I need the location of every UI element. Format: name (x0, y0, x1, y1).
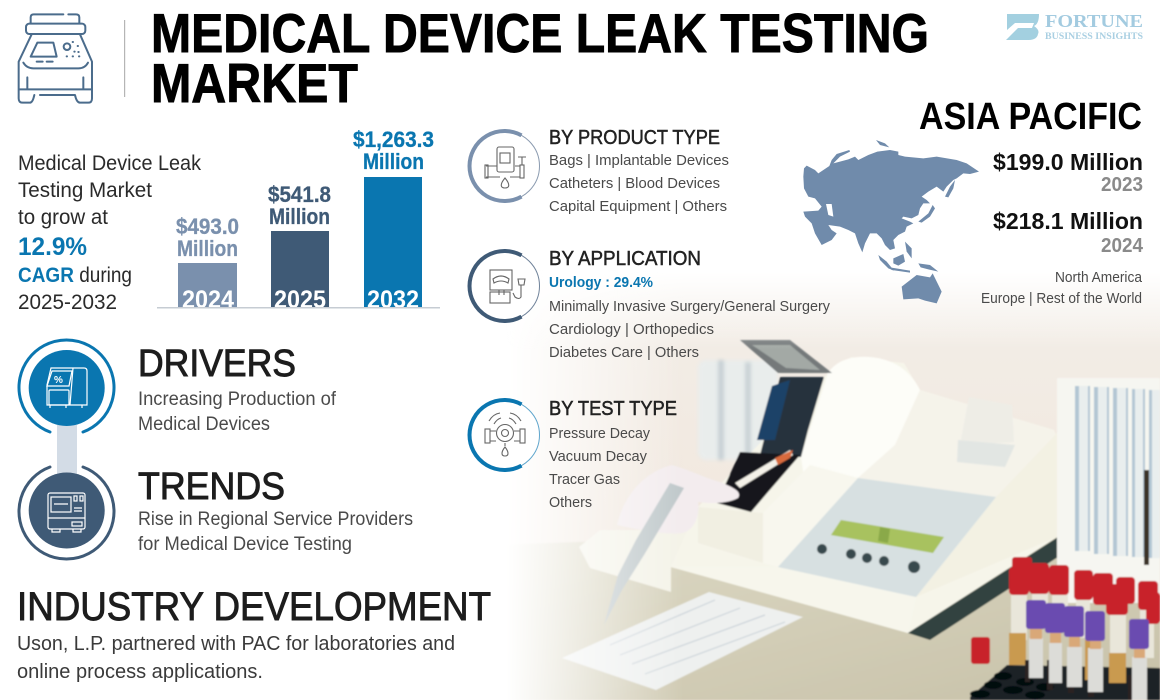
segment list: Capital Equipment | Others (549, 198, 727, 215)
heading: drivers: DRIVERS (138, 343, 296, 385)
drivers text: Medical Devices (138, 414, 270, 435)
segment list (549, 425, 650, 511)
industry development text: Uson, L.P. partnered with PAC for laboratories and (17, 633, 455, 655)
bar 2032: 2032 (367, 286, 419, 314)
segment list: Pressure Decay (549, 425, 650, 442)
bar 2024: $493.0 (176, 214, 239, 239)
other regions: Europe | Rest of the World (981, 291, 1142, 307)
analyzer base (579, 530, 700, 592)
printer cover (698, 507, 763, 563)
segment list: Bags | Implantable Devices (549, 152, 729, 169)
other regions: North America (1055, 270, 1143, 286)
logo: Fortune Business Insights: FORTUNE (1045, 11, 1143, 31)
bar 2032: Million (363, 149, 424, 174)
segment list: Vacuum Decay (549, 448, 647, 465)
regional values (993, 149, 1144, 257)
title (151, 2, 929, 114)
title: MARKET (151, 52, 358, 114)
counter top (500, 520, 1160, 700)
logo: Fortune Business Insights: BUSINESS INSIGHTS (1045, 32, 1143, 42)
sample tubes in compartment (735, 450, 793, 488)
icon: leak testing instrument (19, 14, 92, 103)
bar 2032: $1,263.3 (353, 127, 434, 152)
analyzer right side (916, 433, 1057, 597)
segment list: Cardiology | Orthopedics (549, 321, 714, 338)
panel: by application (470, 248, 830, 361)
heading: BY TEST TYPE (549, 398, 677, 420)
bar 2024: Million (177, 236, 238, 261)
lid (740, 340, 832, 373)
background photo: analyzer in a laboratory (490, 270, 1160, 700)
industry development text: online process applications. (17, 661, 263, 683)
analyzer hood (801, 357, 920, 520)
connector between drivers and trends (57, 425, 77, 475)
icon: surgical monitor (470, 251, 540, 321)
panel: by product type (470, 127, 729, 215)
sample compartment (760, 377, 824, 457)
control panel (778, 478, 996, 597)
heading: BY APPLICATION (549, 248, 701, 270)
paper outlet (960, 397, 1014, 445)
bar 2025 (268, 182, 331, 314)
CAGR text block: to grow at (18, 206, 108, 229)
bar 2025: $541.8 (268, 182, 331, 207)
red caps (971, 557, 1160, 664)
tube rack (970, 665, 1160, 700)
trends text: Rise in Regional Service Providers (138, 509, 413, 530)
bar 2024: 2024 (182, 286, 234, 314)
bar 2025: 2025 (274, 286, 326, 314)
control buttons (817, 544, 920, 573)
heading: industry development: INDUSTRY DEVELOPMENT (17, 585, 491, 629)
icon: drivers: % (54, 375, 63, 386)
icon: pipe with pressure gauge (470, 400, 540, 470)
gloved hand (617, 465, 739, 533)
analyzer printer deck (858, 390, 1057, 497)
CAGR text block: Testing Market (18, 179, 152, 202)
drivers text (138, 389, 337, 435)
icon: device over a leaking pipe (470, 131, 540, 201)
regional values: $199.0 Million (993, 149, 1143, 175)
bar chart: market size (157, 127, 440, 314)
other regions (981, 270, 1143, 307)
regional values: $218.1 Million (993, 208, 1143, 234)
LCD display (831, 520, 944, 553)
segment list: Diabetes Care | Others (549, 344, 699, 361)
industry development text (17, 633, 455, 683)
segment list: Tracer Gas (549, 471, 620, 488)
trends text: for Medical Device Testing (138, 534, 352, 555)
regional values: 2023 (1101, 174, 1143, 196)
ruler rack (1057, 378, 1160, 603)
icon: drivers (19, 340, 114, 432)
CAGR text block: CAGR during (18, 264, 132, 287)
heading: BY PRODUCT TYPE (549, 127, 720, 149)
CAGR text block (18, 152, 201, 314)
segment list (549, 152, 729, 215)
trends text (138, 509, 413, 555)
CAGR text block: 12.9% (18, 233, 87, 261)
bar 2025: Million (269, 204, 330, 229)
purple tubes (1026, 600, 1149, 700)
logo: Fortune Business Insights (1006, 11, 1143, 42)
icon: trends (19, 467, 114, 559)
printed paper on counter (562, 592, 803, 690)
segment list: Others (549, 494, 592, 511)
bar 2032 (353, 127, 434, 314)
CAGR text block: Medical Device Leak (18, 152, 201, 175)
regional values: 2024 (1101, 235, 1144, 257)
panel: by test type (470, 398, 677, 511)
drivers text: Increasing Production of (138, 389, 337, 410)
CAGR text block: 2025-2032 (18, 291, 117, 314)
analyzer front lip (671, 567, 916, 633)
map: Asia Pacific (803, 140, 979, 303)
title: MEDICAL DEVICE LEAK TESTING (151, 2, 929, 64)
pipette (604, 483, 684, 625)
analyzer main body (671, 357, 1057, 633)
reagent bottles behind the analyzer (698, 360, 778, 460)
segment list: Minimally Invasive Surgery/General Surgery (549, 298, 830, 315)
segment list: Catheters | Blood Devices (549, 175, 720, 192)
divider (124, 20, 125, 97)
heading: trends: TRENDS (138, 466, 285, 508)
segment list (549, 298, 830, 361)
analyzer shadow strip (908, 537, 1058, 640)
photo fades (505, 270, 685, 700)
bar 2024 (176, 214, 239, 314)
back blood tubes (1011, 590, 1154, 658)
highlighted share: Urology : 29.4% (549, 274, 653, 291)
